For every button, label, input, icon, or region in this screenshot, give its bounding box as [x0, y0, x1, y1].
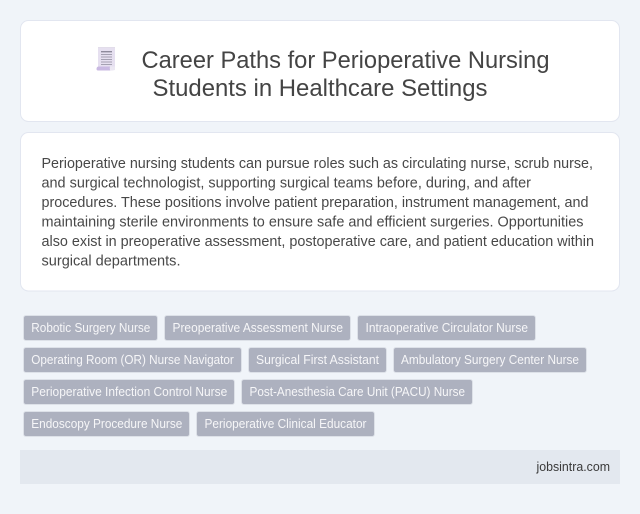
tag: Intraoperative Circulator Nurse [358, 316, 536, 340]
tag: Ambulatory Surgery Center Nurse [394, 348, 586, 372]
panel: description card [20, 132, 620, 291]
tag list [24, 316, 586, 436]
tag: Operating Room (OR) Nurse Navigator: Operating Room (OR) Nurse Navigator [31, 353, 234, 367]
tag: Perioperative Clinical Educator: Perioperative Clinical Educator [204, 417, 366, 431]
tag: Post-Anesthesia Care Unit (PACU) Nurse [242, 380, 472, 404]
footer bar [20, 450, 620, 484]
tag: Post-Anesthesia Care Unit (PACU) Nurse: Post-Anesthesia Care Unit (PACU) Nurse [250, 385, 465, 399]
description text: procedures. These positions involve patient preparation, instrument management, and [42, 195, 588, 211]
description text: maintaining sterile environments to ensure safe and efficient surgeries. Opportunities [42, 214, 584, 230]
tag: Surgical First Assistant [248, 348, 386, 372]
description text: Perioperative nursing students can pursue roles such as circulating nurse, scrub nurse, [42, 156, 593, 172]
panel: title card [20, 20, 620, 122]
title text: Students in Healthcare Settings [152, 75, 488, 102]
tag: Surgical First Assistant: Surgical First Assistant [256, 353, 380, 367]
description text: also exist in preoperative assessment, postoperative care, and patient education within [42, 234, 594, 250]
description text: and surgical technologist, supporting surgical teams before, during, and after [42, 176, 531, 192]
description text [42, 156, 594, 270]
tag: Perioperative Infection Control Nurse [24, 380, 234, 404]
tag: Preoperative Assessment Nurse: Preoperative Assessment Nurse [172, 321, 343, 335]
title text: Career Paths for Perioperative Nursing [142, 47, 550, 74]
icon: paper scroll document [96, 47, 115, 71]
tag: Preoperative Assessment Nurse [164, 316, 350, 340]
tag: Robotic Surgery Nurse: Robotic Surgery Nurse [31, 321, 150, 335]
tag: Endoscopy Procedure Nurse: Endoscopy Procedure Nurse [31, 417, 182, 431]
footer text: source: jobsintra.com [536, 460, 610, 474]
tag: Endoscopy Procedure Nurse [24, 412, 190, 436]
tag: Ambulatory Surgery Center Nurse: Ambulatory Surgery Center Nurse [401, 353, 579, 367]
tag: Robotic Surgery Nurse [24, 316, 158, 340]
tag: Operating Room (OR) Nurse Navigator [24, 348, 242, 372]
description text: surgical departments. [42, 254, 180, 270]
title text [142, 47, 550, 102]
tag: Perioperative Infection Control Nurse: Perioperative Infection Control Nurse [31, 385, 227, 399]
tag: Intraoperative Circulator Nurse: Intraoperative Circulator Nurse [366, 321, 528, 335]
tag: Perioperative Clinical Educator [196, 412, 374, 436]
